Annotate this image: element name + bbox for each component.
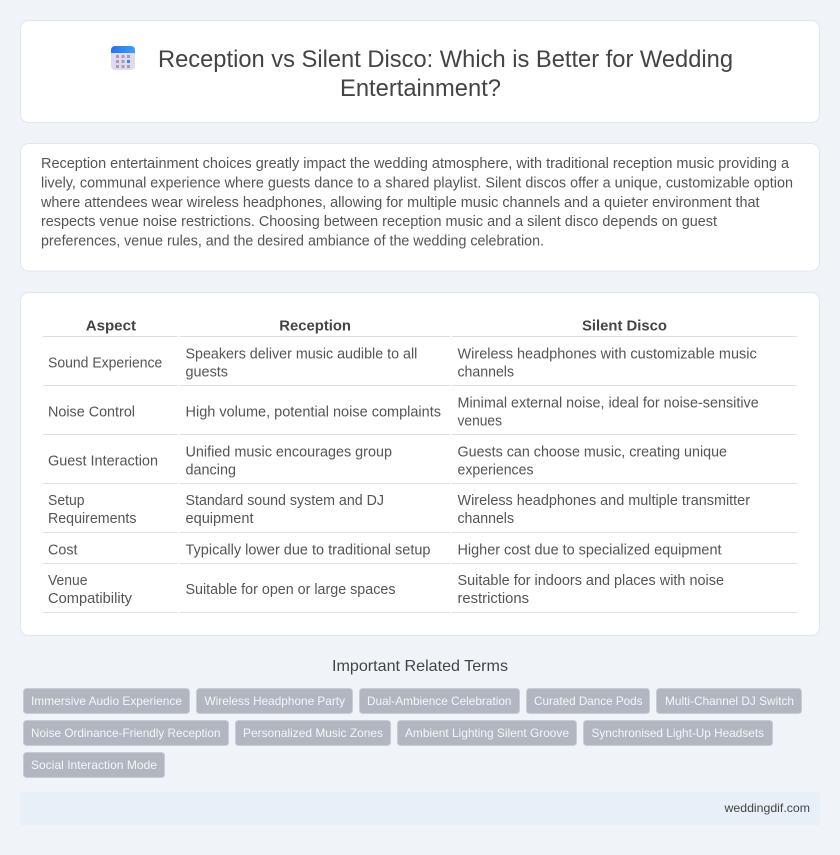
table header row: Silent Disco <box>582 318 667 335</box>
tag: multi-channel dj switch: Multi-Channel DJ Switch <box>665 694 794 708</box>
row: guest interaction <box>43 444 797 484</box>
table header row: Aspect <box>86 318 136 335</box>
tag: wireless headphone party: Wireless Headphone Party <box>204 694 345 708</box>
intro paragraph: respects venue noise restrictions. Choosing between reception music and a silent disco depends on guest <box>41 214 717 230</box>
tag: synchronised light-up headsets <box>584 720 772 746</box>
tag: ambient lighting silent groove <box>398 720 576 746</box>
related term tags <box>24 688 802 778</box>
row: sound experience: Speakers deliver music audible to all <box>186 346 417 362</box>
tag: social interaction mode <box>24 752 164 778</box>
tag: personalized music zones <box>236 720 390 746</box>
intro paragraph: preferences, venue rules, and the desired ambiance of the wedding celebration. <box>41 234 544 250</box>
row: noise control: Minimal external noise, ideal for noise-sensitive <box>458 395 759 411</box>
tag: ambient lighting silent groove: Ambient Lighting Silent Groove <box>405 726 569 740</box>
row: cost: Higher cost due to specialized equipment <box>458 542 722 558</box>
row: sound experience: channels <box>458 364 514 380</box>
row: venue compatibility: Suitable for indoors and places with noise <box>458 573 724 589</box>
row: cost: Typically lower due to traditional setup <box>186 542 430 558</box>
tag: noise ordinance-friendly reception: Noise Ordinance-Friendly Reception <box>31 726 220 740</box>
row: guest interaction: dancing <box>186 462 236 478</box>
row: venue compatibility <box>43 573 797 613</box>
row: cost <box>43 542 797 564</box>
tag: curated dance pods <box>526 688 650 714</box>
row: sound experience <box>43 346 797 386</box>
row: setup requirements <box>43 493 797 533</box>
intro paragraph <box>40 156 793 250</box>
panel: title header <box>20 20 820 122</box>
row: guest interaction: Guests can choose music, creating unique <box>458 444 727 460</box>
row: setup requirements: channels <box>458 511 514 527</box>
intro paragraph: Reception entertainment choices greatly impact the wedding atmosphere, with traditional reception music providing a <box>41 156 789 172</box>
tag: noise ordinance-friendly reception <box>24 720 228 746</box>
row: venue compatibility: Compatibility <box>48 591 133 607</box>
row: guest interaction: experiences <box>458 462 534 478</box>
panel: introduction text <box>20 144 820 271</box>
row: noise control: Noise Control <box>48 404 135 420</box>
panel: comparison table <box>20 292 820 636</box>
row: guest interaction: Guest Interaction <box>48 453 158 469</box>
tag: curated dance pods: Curated Dance Pods <box>534 694 642 708</box>
heading: important related terms: Important Related Terms <box>332 658 508 675</box>
row: setup requirements: Setup <box>48 493 84 509</box>
row: setup requirements: equipment <box>186 511 254 527</box>
intro paragraph: lively, communal experience where guests dance to a shared playlist. Silent discos offer a unique, customizable option <box>41 176 793 192</box>
footer bar <box>20 792 820 825</box>
title: Entertainment? <box>340 75 501 102</box>
title <box>158 46 733 102</box>
tag: dual-ambience celebration <box>360 688 520 714</box>
tag: immersive audio experience: Immersive Audio Experience <box>31 694 182 708</box>
tag: multi-channel dj switch <box>656 688 802 714</box>
title: Reception vs Silent Disco: Which is Better for Wedding <box>158 46 733 73</box>
tag: dual-ambience celebration: Dual-Ambience Celebration <box>367 694 512 708</box>
icon: calendar <box>111 46 135 70</box>
row: setup requirements: Requirements <box>48 511 136 527</box>
tag: personalized music zones: Personalized Music Zones <box>243 726 383 740</box>
intro paragraph: where attendees wear wireless headphones, allowing for multiple music channels and a quieter environment that <box>40 195 760 211</box>
row: sound experience: Sound Experience <box>48 355 162 371</box>
footer source: weddingdif.com <box>723 801 810 815</box>
row: guest interaction: Unified music encourages group <box>186 444 392 460</box>
row: cost: Cost <box>48 542 78 558</box>
row: venue compatibility: Venue <box>48 573 88 589</box>
row: noise control <box>43 395 797 435</box>
row: venue compatibility: restrictions <box>458 591 529 607</box>
tag: social interaction mode: Social Interaction Mode <box>31 758 157 772</box>
tag: wireless headphone party <box>196 688 352 714</box>
row: noise control: venues <box>458 413 502 429</box>
tag: synchronised light-up headsets: Synchronised Light-Up Headsets <box>592 726 764 740</box>
table header row <box>43 318 797 337</box>
row: sound experience: Wireless headphones with customizable music <box>458 346 757 362</box>
tag: immersive audio experience <box>24 688 190 714</box>
row: sound experience: guests <box>186 364 228 380</box>
row: setup requirements: Wireless headphones and multiple transmitter <box>458 493 750 509</box>
table header row: Reception <box>279 318 351 335</box>
row: setup requirements: Standard sound system and DJ <box>186 493 384 509</box>
row: noise control: High volume, potential noise complaints <box>186 404 441 420</box>
row: venue compatibility: Suitable for open or large spaces <box>186 582 396 598</box>
